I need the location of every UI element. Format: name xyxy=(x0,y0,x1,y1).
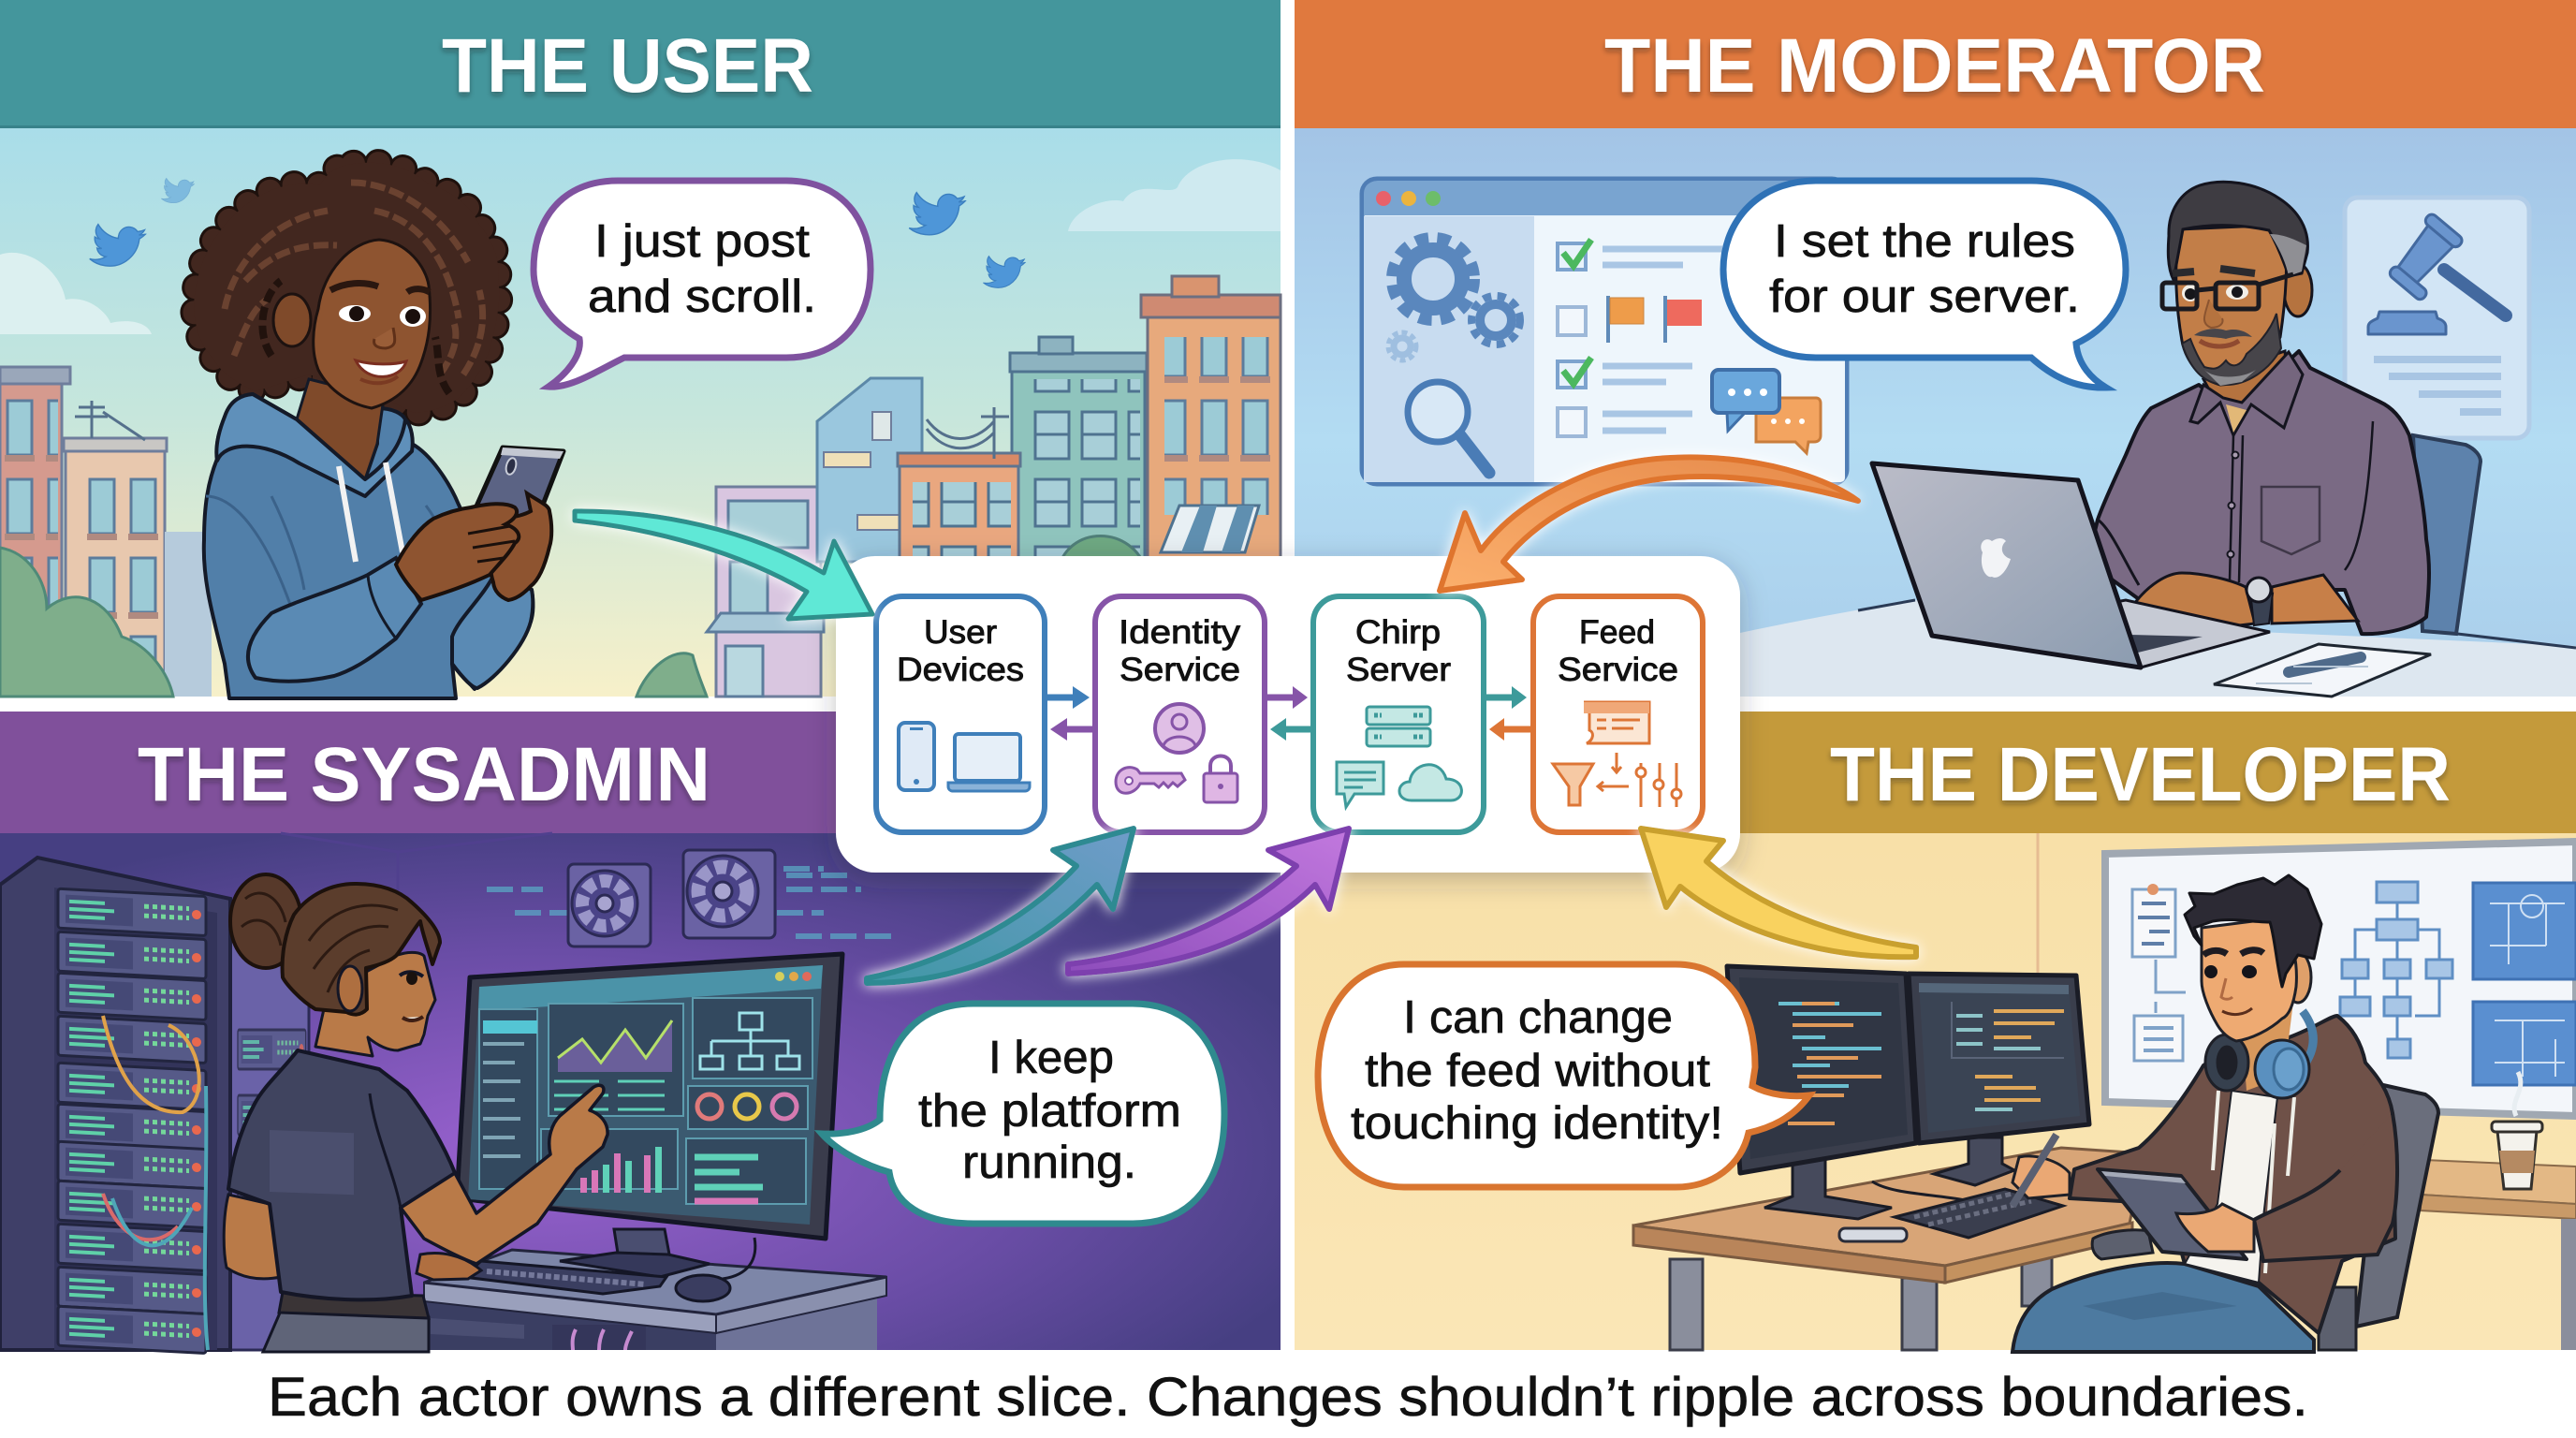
speech bubble: sysadmin: the platform xyxy=(918,1086,1181,1137)
hand holding tablet xyxy=(2176,1204,2254,1252)
headphones xyxy=(2205,1011,2313,1098)
speech bubble: user: I just post xyxy=(594,216,810,267)
speech bubble: developer: the feed without xyxy=(1365,1046,1710,1096)
user header band xyxy=(0,0,1281,128)
ear xyxy=(2285,952,2311,1003)
heading: the user: THE USER xyxy=(442,23,813,109)
gavel card xyxy=(2345,198,2529,438)
connector arrows xyxy=(1045,686,1533,741)
back desk and coffee cup xyxy=(2421,1072,2576,1350)
arrow: sysadmin to chirp server xyxy=(1068,829,1349,974)
face xyxy=(314,240,431,408)
heading: the moderator: THE MODERATOR xyxy=(1604,23,2265,109)
laptop xyxy=(1872,463,2270,668)
character: developer xyxy=(2012,875,2438,1352)
hair xyxy=(2168,182,2307,280)
hair xyxy=(2185,875,2321,987)
character: moderator at laptop xyxy=(1872,182,2481,668)
icon: funnel and sliders xyxy=(1553,753,1681,807)
moderation dashboard window xyxy=(1362,179,1847,484)
jeans xyxy=(2012,1263,2314,1352)
character: sysadmin woman xyxy=(224,874,607,1352)
face xyxy=(2176,225,2287,385)
box: chirp server xyxy=(1313,596,1484,832)
server room background xyxy=(0,833,1281,1350)
t-shirt xyxy=(2185,1091,2277,1283)
beard xyxy=(2182,314,2281,385)
panel: the user xyxy=(0,0,1281,698)
phone xyxy=(471,448,564,552)
far sleeve and near sleeve xyxy=(452,571,533,688)
icon: gears xyxy=(1388,238,1520,360)
box: chirp server: Server xyxy=(1346,652,1451,688)
whiteboard xyxy=(2105,842,2576,1116)
hands xyxy=(396,493,551,600)
bun xyxy=(230,874,301,968)
face xyxy=(2202,917,2296,1041)
lower hand xyxy=(417,1254,481,1280)
curly hair xyxy=(194,163,499,412)
left arm xyxy=(224,1195,281,1279)
speech bubble: moderator: for our server. xyxy=(1769,271,2080,322)
speech bubble: sysadmin: running. xyxy=(962,1137,1136,1188)
arrow: user to devices xyxy=(575,511,872,619)
pointing arm xyxy=(401,1085,607,1264)
icon: magnifier xyxy=(1408,382,1489,473)
icon: cloud xyxy=(1399,765,1461,800)
box: user devices: User xyxy=(924,614,997,651)
icon: lock xyxy=(1204,756,1237,802)
glasses xyxy=(2162,274,2293,309)
heading: the sysadmin: THE SYSADMIN xyxy=(138,732,710,817)
heading: the developer: THE DEVELOPER xyxy=(1830,732,2451,817)
neck xyxy=(2242,1002,2293,1091)
speech bubble: sysadmin xyxy=(822,1004,1224,1224)
tablet xyxy=(2098,1169,2247,1259)
chair back xyxy=(2413,435,2481,634)
icon: laptop xyxy=(948,734,1030,791)
hoodie body xyxy=(204,394,533,698)
box: chirp server: Chirp xyxy=(1355,614,1441,651)
panel: the sysadmin xyxy=(0,712,1281,1354)
drawstrings xyxy=(2213,1091,2294,1273)
box: user devices: Devices xyxy=(897,652,1024,688)
workstation desk and monitors xyxy=(1633,966,2144,1350)
trousers and belt xyxy=(263,1292,429,1352)
hair xyxy=(283,884,440,1015)
icon: gavel xyxy=(2368,213,2506,334)
neck xyxy=(2203,351,2289,435)
hoodie xyxy=(2070,1016,2395,1333)
icon: phone xyxy=(899,723,934,790)
speech bubble: moderator xyxy=(1723,181,2126,388)
chair xyxy=(2092,1085,2438,1350)
chat bubbles xyxy=(1712,370,1821,453)
icon: server stack xyxy=(1367,707,1430,746)
speech bubble: sysadmin: I keep xyxy=(988,1033,1114,1083)
character: woman with phone xyxy=(194,163,564,698)
ear, eye, smile xyxy=(338,966,362,1011)
user street background xyxy=(0,128,1281,697)
server racks xyxy=(0,858,309,1354)
panel: the moderator xyxy=(1295,0,2576,697)
icon: chat bubble xyxy=(1337,762,1383,807)
panel: the developer xyxy=(1295,712,2576,1352)
paper and pen xyxy=(2214,644,2431,697)
hoodie seams xyxy=(206,496,451,618)
speech bubble: user: and scroll. xyxy=(588,271,816,322)
box: feed service: Service xyxy=(1558,652,1678,688)
neck xyxy=(297,379,384,479)
arrow: developer to feed service xyxy=(1641,829,1916,957)
icon: user badge xyxy=(1155,704,1204,753)
speech bubble: developer xyxy=(1318,964,1809,1187)
desk with keyboard and mouse xyxy=(424,1229,886,1350)
speech bubble: user xyxy=(534,181,871,387)
arrow: sysadmin to identity xyxy=(867,829,1134,983)
sleeve xyxy=(2254,1113,2397,1261)
box: user devices xyxy=(876,596,1045,832)
monitor dashboard xyxy=(457,954,842,1239)
developer header band xyxy=(1295,712,2576,833)
caption: Each actor owns a different slice. Changes shouldn’t ripple across boundaries. xyxy=(268,1367,2308,1428)
ear xyxy=(273,294,311,346)
box: identity service xyxy=(1095,596,1265,832)
arrow: moderator to chirp server xyxy=(1440,457,1858,591)
box: identity service: Service xyxy=(1120,652,1240,688)
icon: key xyxy=(1116,768,1185,793)
moderator background xyxy=(1295,128,2576,697)
brows, eyes, nose, mouth xyxy=(2203,950,2263,955)
checklist rows xyxy=(1558,240,1722,436)
icon: scroll xyxy=(1584,702,1649,743)
box: feed service xyxy=(1533,596,1703,832)
forearm, hand and watch xyxy=(2272,575,2358,624)
twitter birds xyxy=(89,177,1026,290)
ear xyxy=(2284,264,2312,316)
speech bubble: moderator: I set the rules xyxy=(1774,216,2075,267)
developer room background xyxy=(1295,833,2576,1350)
central architecture card xyxy=(836,556,1740,873)
speech bubble: developer: touching identity! xyxy=(1351,1098,1723,1149)
shirt xyxy=(228,1050,455,1299)
box: feed service: Feed xyxy=(1579,614,1655,651)
sysadmin header band xyxy=(0,712,1281,833)
hood collar xyxy=(216,394,413,496)
brows, eyes, nose xyxy=(2173,269,2255,273)
pen and drawing hand xyxy=(2012,1135,2070,1206)
neck and face xyxy=(315,952,435,1056)
speech bubble: developer: I can change xyxy=(1403,992,1673,1043)
drawstrings xyxy=(339,462,402,562)
moderator header band xyxy=(1295,0,2576,128)
box: identity service: Identity xyxy=(1119,614,1241,651)
wall fans xyxy=(568,850,775,946)
shirt xyxy=(2087,351,2429,634)
